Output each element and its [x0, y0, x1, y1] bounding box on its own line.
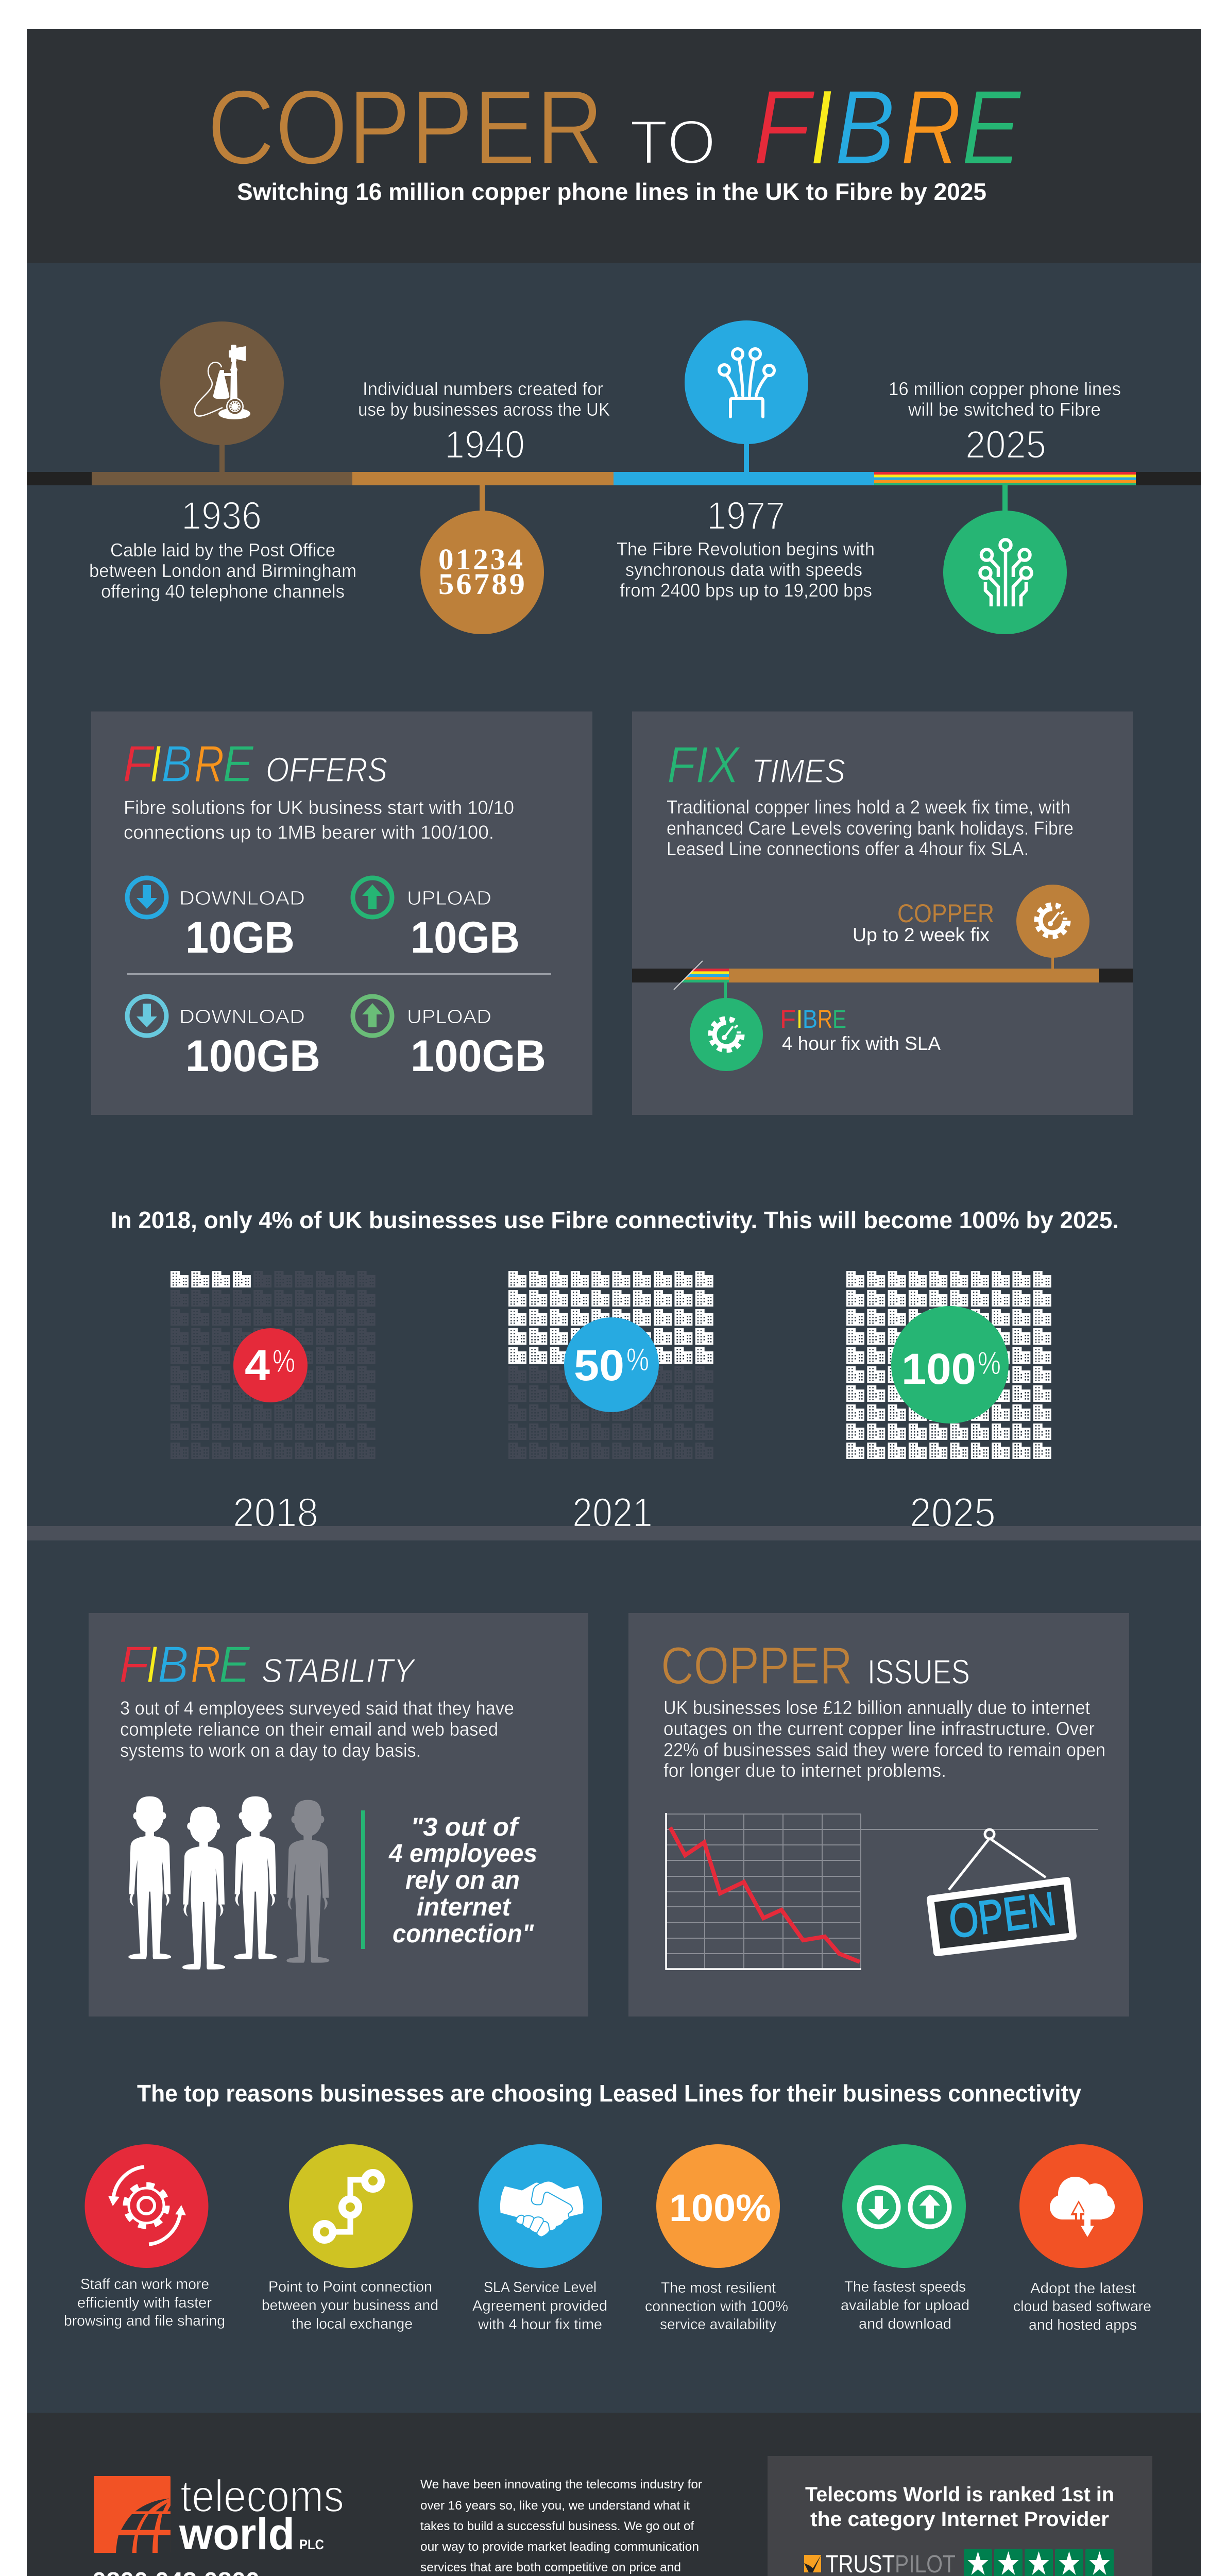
value: download 100GB: 100GB	[185, 1031, 320, 1081]
label: copper fix	[853, 899, 994, 945]
heading: ranking: the category Internet Provider	[810, 2508, 1109, 2531]
value: 100%: %	[978, 1346, 1001, 1381]
chart: 2025 building grid	[846, 1271, 1051, 1459]
title: F	[753, 68, 815, 187]
heading: fibre stability	[119, 1636, 416, 1693]
text: reason 4: The most resilient	[661, 2280, 776, 2296]
text: fibre offers body	[124, 797, 514, 843]
value: 4%: %	[273, 1344, 295, 1379]
panel: fix times	[632, 711, 1133, 1115]
text: fibre stability body	[120, 1698, 514, 1761]
reason: cloud apps	[1019, 2144, 1143, 2268]
reason: SLA	[479, 2144, 602, 2268]
text: reason 3: with 4 hour fix time	[478, 2316, 602, 2333]
icon: numbers: 56789	[438, 567, 527, 601]
icon: connected nodes	[316, 2173, 381, 2240]
heading: fibre stability: I	[146, 1636, 158, 1693]
text: about paragraph: We have been innovating the telecoms industry for	[420, 2478, 702, 2492]
value: upload 10GB: 10GB	[411, 913, 520, 962]
text: 2025 description: will be switched to Fibre	[908, 399, 1101, 420]
text: copper issues body: for longer due to internet problems.	[663, 1760, 946, 1781]
icon: trustpilot mark	[804, 2555, 821, 2572]
timeline milestone 1940	[420, 485, 544, 634]
icon: handshake	[500, 2182, 583, 2236]
value: 4%	[245, 1341, 295, 1389]
text: reason 2: the local exchange	[292, 2316, 413, 2332]
text: 1940 description: use by businesses across the UK	[358, 399, 610, 420]
text: reason 3: Agreement provided	[472, 2298, 607, 2314]
title: TO	[629, 107, 716, 177]
title	[207, 68, 1022, 187]
text: reason 2: Point to Point connection	[268, 2279, 432, 2295]
heading: ranking: Telecoms World is ranked 1st in	[805, 2483, 1114, 2506]
icon: fibre strands	[719, 349, 774, 417]
label: fibre fix: I	[796, 1005, 803, 1033]
icon: copper gauge	[1016, 885, 1089, 969]
year 1977: 1977	[707, 494, 785, 538]
label: copper fix: Up to 2 week fix	[853, 924, 990, 945]
icon: candlestick telephone	[195, 345, 250, 419]
text: 1936 description: between London and Birmingham	[89, 560, 356, 581]
callout: quote: rely on an	[405, 1866, 520, 1894]
year 2025: 2025	[965, 423, 1046, 467]
text: copper issues body: UK businesses lose £12 billion annually due to internet	[663, 1697, 1091, 1718]
text: reason 1	[64, 2276, 225, 2329]
header band	[27, 29, 1201, 263]
text: reason 4: service availability	[660, 2316, 776, 2333]
text: copper issues body: outages on the current copper line infrastructure. Over	[663, 1718, 1095, 1739]
icon: 100 percent: 100%	[669, 2187, 771, 2229]
callout: quote: connection"	[393, 1919, 534, 1948]
label: fibre fix: E	[832, 1005, 846, 1033]
text: reason 5	[841, 2279, 969, 2332]
footer band	[27, 2413, 1201, 2576]
logo: telecoms world: telecoms	[180, 2470, 344, 2521]
text: 1936 description: Cable laid by the Post Office	[110, 539, 335, 561]
text: reason 4	[645, 2280, 788, 2333]
label: fibre fix: R	[818, 1005, 832, 1033]
title: COPPER	[207, 68, 604, 187]
label: upload: UPLOAD	[407, 888, 491, 909]
logo: telecoms world	[94, 2470, 344, 2559]
text: 1977 description	[617, 538, 875, 601]
label: download: DOWNLOAD	[179, 1006, 305, 1028]
icon: numbers: 01234	[438, 543, 525, 576]
text: copper issues body	[663, 1697, 1105, 1781]
logo: telecoms world: world	[179, 2510, 295, 2559]
text: about paragraph: our way to provide market leading communication	[420, 2540, 699, 2554]
icon: numbers	[438, 543, 527, 601]
callout: quote: "3 out of	[411, 1812, 520, 1841]
panel: copper issues	[628, 1613, 1129, 2016]
heading: copper issues: ISSUES	[867, 1653, 970, 1691]
label: fibre fix: B	[803, 1005, 818, 1033]
text: reason 6	[1013, 2280, 1151, 2333]
text: reason 1: efficiently with faster	[77, 2295, 212, 2311]
panel: trustpilot	[768, 2456, 1152, 2576]
icon: open sign: OPEN	[946, 1883, 1059, 1948]
year label 2025: 2025	[910, 1489, 996, 1535]
heading: fibre stability: R	[191, 1636, 220, 1693]
panel: fibre stability	[89, 1613, 588, 2016]
text: copper issues body: 22% of businesses said they were forced to remain open	[663, 1739, 1105, 1760]
icon: download 10GB	[127, 878, 166, 917]
text: reason 4: connection with 100%	[645, 2298, 788, 2315]
label: upload: UPLOAD	[407, 1006, 491, 1028]
title: I	[810, 68, 832, 187]
text: 1936 description	[89, 539, 356, 602]
heading: fibre offers: I	[150, 735, 161, 793]
text: fibre stability body: systems to work on a day to day basis.	[120, 1740, 421, 1761]
year 1936: 1936	[181, 494, 262, 538]
value: upload 100GB: 100GB	[411, 1031, 546, 1081]
heading: ranking	[805, 2483, 1114, 2531]
text: 1977 description: The Fibre Revolution begins with	[617, 538, 875, 560]
text: about paragraph: over 16 years so, like you, we understand what it	[420, 2499, 690, 2513]
reason: faster browsing	[84, 2144, 208, 2268]
chart: 2021 building grid	[508, 1271, 713, 1459]
label: fibre fix	[780, 1005, 941, 1054]
timeline milestone 1977	[685, 320, 808, 472]
title: B	[835, 68, 895, 187]
title: E	[961, 68, 1022, 187]
text: 2025 description	[889, 378, 1121, 420]
text: 1977 description: synchronous data with speeds	[625, 559, 862, 580]
text: fix times body: enhanced Care Levels covering bank holidays. Fibre	[667, 818, 1074, 839]
reason: point to point	[289, 2144, 413, 2268]
chart: 2018 building grid	[171, 1271, 376, 1459]
value: download 10GB: 10GB	[185, 913, 295, 962]
reason: fastest speeds	[842, 2144, 966, 2268]
subtitle: Switching 16 million copper phone lines in the UK to Fibre by 2025	[237, 178, 986, 205]
icon: logo mark	[94, 2476, 171, 2553]
text: 1936 description: offering 40 telephone channels	[101, 581, 345, 602]
year label 2018: 2018	[233, 1489, 318, 1535]
callout: quote: 4 employees	[388, 1839, 537, 1868]
icon: upload 10GB	[353, 878, 392, 917]
icon: upload 100GB	[353, 996, 392, 1036]
value: 50%: 50	[574, 1341, 624, 1389]
text: 2025 description: 16 million copper phone lines	[889, 378, 1121, 399]
text: about paragraph: services that are both competitive on price and	[420, 2561, 681, 2574]
text: reason 1: Staff can work more	[80, 2276, 209, 2293]
callout: quote	[388, 1812, 537, 1948]
trustpilot wordmark	[826, 2551, 956, 2576]
text: fix times body: Leased Line connections offer a 4hour fix SLA.	[667, 838, 1029, 859]
text: about paragraph: takes to build a successful business. We go out of	[420, 2519, 694, 2533]
heading: fix times	[667, 736, 845, 794]
text: fibre offers body: Fibre solutions for UK business start with 10/10	[124, 797, 514, 818]
heading: fibre offers: F	[123, 735, 155, 793]
heading: fibre offers	[123, 735, 387, 793]
text: fibre offers body: connections up to 1MB bearer with 100/100.	[124, 822, 494, 843]
text: reason 1: browsing and file sharing	[64, 2313, 225, 2329]
heading: fibre offers: OFFERS	[266, 751, 387, 789]
callout: quote: internet	[417, 1892, 512, 1921]
heading: fibre offers: R	[194, 735, 224, 793]
heading: fibre stability: STABILITY	[262, 1652, 416, 1689]
heading: fix times: FIX	[667, 736, 741, 794]
text: fix times body: Traditional copper lines hold a 2 week fix time, with	[667, 796, 1070, 818]
text: reason 2	[262, 2279, 438, 2332]
text: reason 2: between your business and	[262, 2297, 438, 2314]
icon: circuit	[980, 540, 1031, 606]
label: fibre fix: 4 hour fix with SLA	[782, 1033, 941, 1054]
icon: four people	[128, 1797, 329, 1970]
text: about paragraph	[420, 2478, 702, 2576]
text: fibre stability body: complete reliance on their email and web based	[120, 1719, 498, 1740]
text: 1940 description: Individual numbers created for	[363, 378, 603, 399]
heading: top reasons: The top reasons businesses are choosing Leased Lines for their business connectivity	[137, 2080, 1081, 2107]
text: reason 6: Adopt the latest	[1030, 2280, 1136, 2297]
title: R	[900, 68, 961, 187]
icon: open sign	[930, 1829, 1073, 1953]
value: 4%: 4	[245, 1341, 270, 1389]
icon: cloud transfer	[1050, 2177, 1115, 2237]
label: copper fix: COPPER	[897, 899, 994, 928]
heading: fibre offers: B	[161, 735, 192, 793]
heading: 2018 adoption: In 2018, only 4% of UK businesses use Fibre connectivity. This will become 100% by 2025.	[111, 1207, 1119, 1233]
text: reason 5: available for upload	[841, 2297, 969, 2314]
text: reason 6: and hosted apps	[1029, 2317, 1137, 2333]
heading: fibre stability: E	[219, 1636, 250, 1693]
text: reason 6: cloud based software	[1013, 2298, 1151, 2315]
timeline bar	[27, 472, 1201, 485]
heading: fibre stability: B	[158, 1636, 189, 1693]
heading: fibre offers: E	[223, 735, 254, 793]
text: reason 5: The fastest speeds	[844, 2279, 966, 2295]
main section background	[27, 263, 1201, 2413]
text: fix times body	[667, 796, 1074, 859]
timeline milestone 2025	[943, 485, 1067, 634]
icon: fibre gauge	[690, 982, 763, 1071]
logo: telecoms world: PLC	[299, 2537, 324, 2552]
heading: fibre stability: F	[119, 1636, 151, 1693]
value: 100%: 100	[901, 1345, 976, 1393]
text: reason 3	[472, 2279, 607, 2333]
text: reason 3: SLA Service Level	[484, 2279, 597, 2296]
value: 50%	[574, 1341, 649, 1389]
heading: fix times: TIMES	[752, 752, 845, 790]
text: fibre stability body: 3 out of 4 employees surveyed said that they have	[120, 1698, 514, 1719]
icon: five stars	[964, 2549, 1114, 2576]
panel: fibre offers	[91, 711, 592, 1115]
year 1940: 1940	[445, 423, 525, 467]
label: fibre fix: F	[780, 1005, 796, 1033]
icon: download 100GB	[127, 996, 166, 1036]
chart: falling line	[666, 1813, 1098, 1969]
text: reason 5: and download	[859, 2316, 951, 2332]
icon: gear with arrows	[108, 2167, 186, 2244]
timeline milestone 1936	[160, 321, 284, 472]
label: download: DOWNLOAD	[179, 888, 305, 909]
text: 1940 description	[358, 378, 610, 420]
heading: copper issues: COPPER	[661, 1636, 853, 1695]
year label 2021: 2021	[572, 1489, 653, 1535]
icon: download upload rings	[859, 2188, 949, 2227]
reason: resilience	[656, 2144, 780, 2268]
value: 50%: %	[626, 1342, 649, 1378]
copper to fibre cable	[632, 961, 1133, 990]
text: 1977 description: from 2400 bps up to 19,200 bps	[620, 580, 872, 601]
